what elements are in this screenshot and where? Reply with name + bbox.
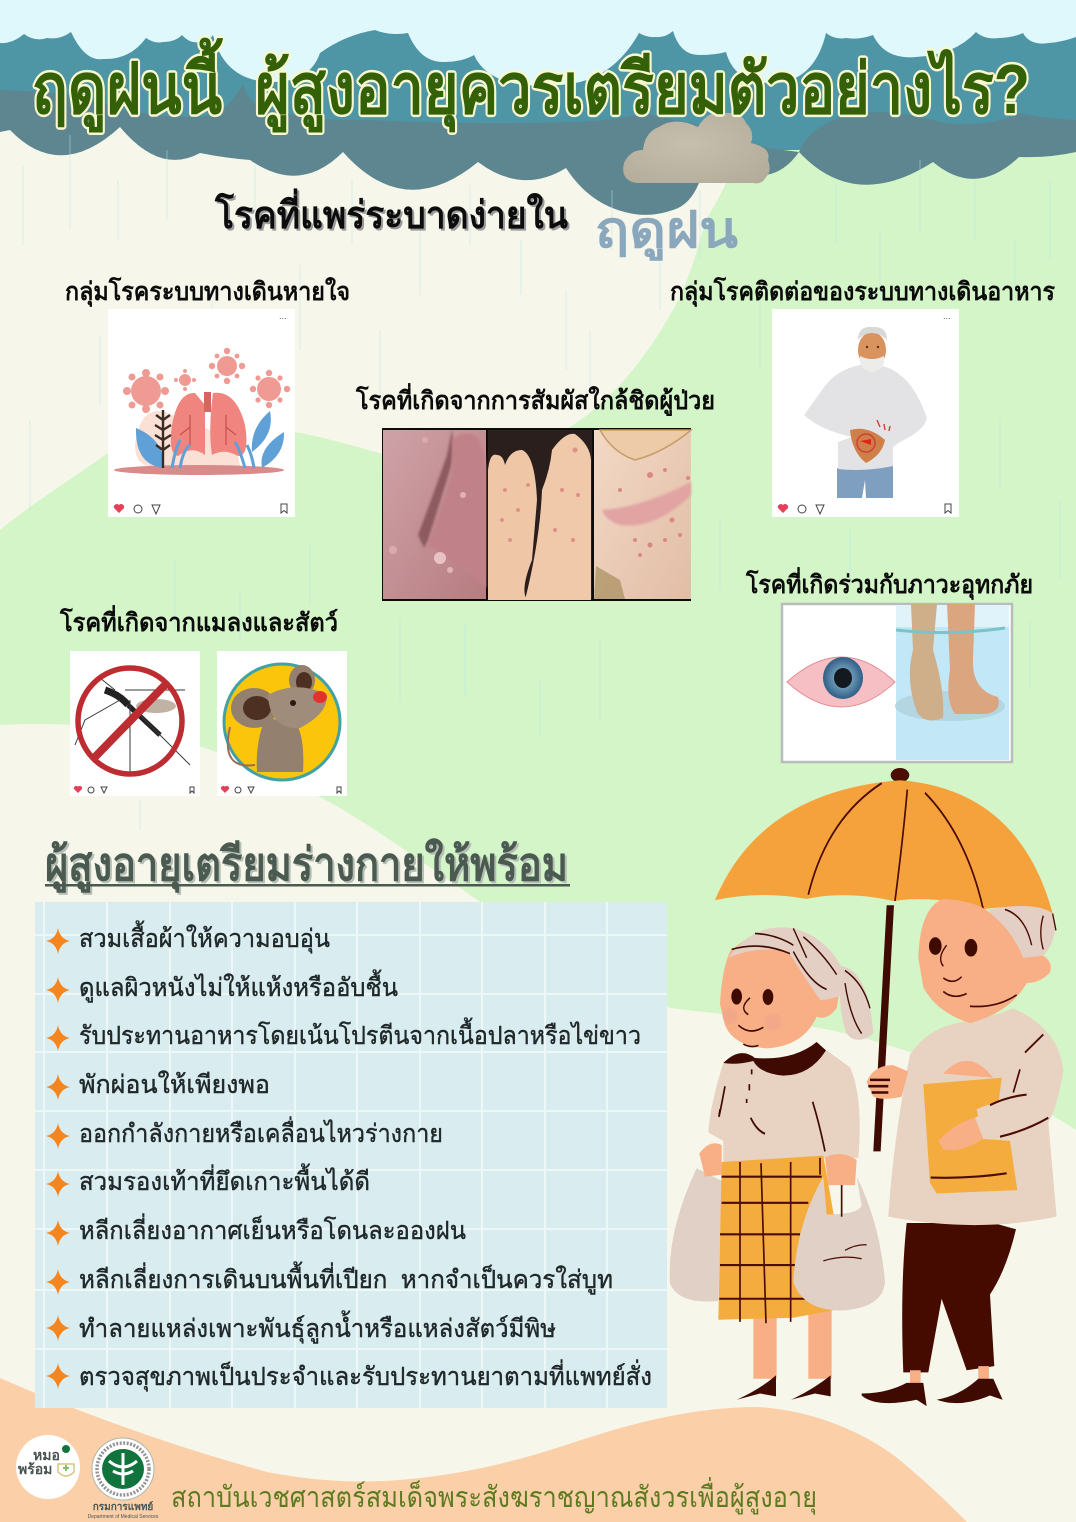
illustration: yellow disc xyxy=(224,664,340,780)
section heading: elders prepare your body: ผู้สูงอายุเตรียมร่างกายให้พร้อม xyxy=(47,839,570,895)
illustration: rat xyxy=(228,665,327,772)
man xyxy=(862,899,1063,1406)
photo panel: foot soles xyxy=(488,430,592,600)
icon: prohibition ring xyxy=(78,668,182,774)
checklist item 1: สวมเสื้อผ้าให้ความอบอุ่น xyxy=(79,920,330,954)
illustration: elderly couple under umbrella xyxy=(670,768,1063,1406)
logo: doctor-ready badge: หมอ xyxy=(33,1447,60,1463)
rain streaks xyxy=(23,135,1060,830)
header clouds xyxy=(0,30,1076,215)
subheading: diseases spreading easily in: โรคที่แพร่ระบาดง่ายใน xyxy=(216,190,570,239)
checklist item 3: รับประทานอาหารโดยเน้นโปรตีนจากเนื้อปลาหรือไข่ขาว xyxy=(79,1017,641,1050)
card: man with stomach ache xyxy=(772,309,959,517)
icons: card action bar xyxy=(778,311,951,514)
checklist item 5: ออกกำลังกายหรือเคลื่อนไหวร่างกาย xyxy=(79,1116,443,1148)
illustration: lungs xyxy=(114,392,284,475)
umbrella xyxy=(715,768,1053,1151)
icons: card action bar xyxy=(114,311,287,514)
card: rat xyxy=(217,651,347,796)
checklist item 9: ทำลายแหล่งเพาะพันธุ์ลูกน้ำหรือแหล่งสัตว์มีพิษ xyxy=(79,1310,556,1344)
checklist item 4: พักผ่อนให้เพียงพอ xyxy=(79,1070,270,1099)
photo panel: hand xyxy=(383,430,486,599)
illustration: man xyxy=(804,327,927,498)
checklist item 7: หลีกเลี่ยงอากาศเย็นหรือโดนละอองฝน xyxy=(79,1213,466,1245)
label: close-contact diseases: โรคที่เกิดจากการสัมผัสใกล้ชิดผู้ป่วย xyxy=(355,383,715,417)
photo: hand, foot and mouth rash xyxy=(382,428,691,601)
card: mosquito prohibited xyxy=(70,651,200,796)
checklist item 2: ดูแลผิวหนังไม่ให้แห้งหรืออับชื้น xyxy=(79,969,398,1003)
subheading: rainy season: ฤดูฝน xyxy=(595,202,738,261)
label: digestive diseases: กลุ่มโรคติดต่อของระบบทางเดินอาหาร xyxy=(670,276,1056,308)
icons: card action bar xyxy=(221,786,341,793)
illustration: leaves xyxy=(136,410,284,468)
checklist item 1 xyxy=(46,920,330,954)
footer: institute name: สถาบันเวชศาสตร์สมเด็จพระสังฆราชญาณสังวรเพื่อผู้สูงอายุ xyxy=(171,1477,817,1515)
icons: card action bar: ... xyxy=(279,311,287,321)
panel: preparation checklist xyxy=(35,902,667,1408)
illustration: virus particles xyxy=(123,348,290,413)
card: red eye and flooded feet xyxy=(782,604,1012,762)
label: insect and animal borne diseases: โรคที่เกิดจากแมลงและสัตว์ xyxy=(59,605,338,637)
subheading: diseases spreading easily in: โรคที่แพร่ระบาดง่ายใน xyxy=(214,188,568,237)
logo: doctor-ready badge xyxy=(16,1435,80,1499)
photo panel: mouth xyxy=(594,430,691,599)
checklist item 6: สวมรองเท้าที่ยึดเกาะพื้นได้ดี xyxy=(79,1163,370,1196)
checklist item 10: ตรวจสุขภาพเป็นประจำและรับประทานยาตามที่แพทย์สั่ง xyxy=(79,1359,652,1392)
illustration: mosquito xyxy=(75,678,190,775)
logo: doctor-ready badge: พร้อม xyxy=(18,1461,52,1477)
section heading: elders prepare your body: ผู้สูงอายุเตรียมร่างกายให้พร้อม xyxy=(45,837,568,893)
label: flood-related diseases: โรคที่เกิดร่วมกับภาวะอุทกภัย xyxy=(745,567,1033,601)
icons: card action bar xyxy=(74,786,194,793)
checklist item 8: หลีกเลี่ยงการเดินบนพื้นที่เปียก หากจำเป็นควรใส่บูท xyxy=(79,1261,613,1295)
icons: card action bar: ... xyxy=(943,311,951,321)
icon: small grey cloud xyxy=(623,113,770,183)
card: lungs xyxy=(108,309,295,517)
illustration: red eye xyxy=(787,657,895,707)
label: respiratory diseases: กลุ่มโรคระบบทางเดินหายใจ xyxy=(65,276,350,308)
illustration: feet in water xyxy=(895,604,1009,760)
logo: Department of Medical Services seal: Department of Medical Services xyxy=(88,1514,159,1520)
logo: Department of Medical Services seal xyxy=(88,1438,159,1520)
logo: Department of Medical Services seal: กรมการแพทย์ xyxy=(93,1501,153,1513)
woman xyxy=(670,927,885,1400)
